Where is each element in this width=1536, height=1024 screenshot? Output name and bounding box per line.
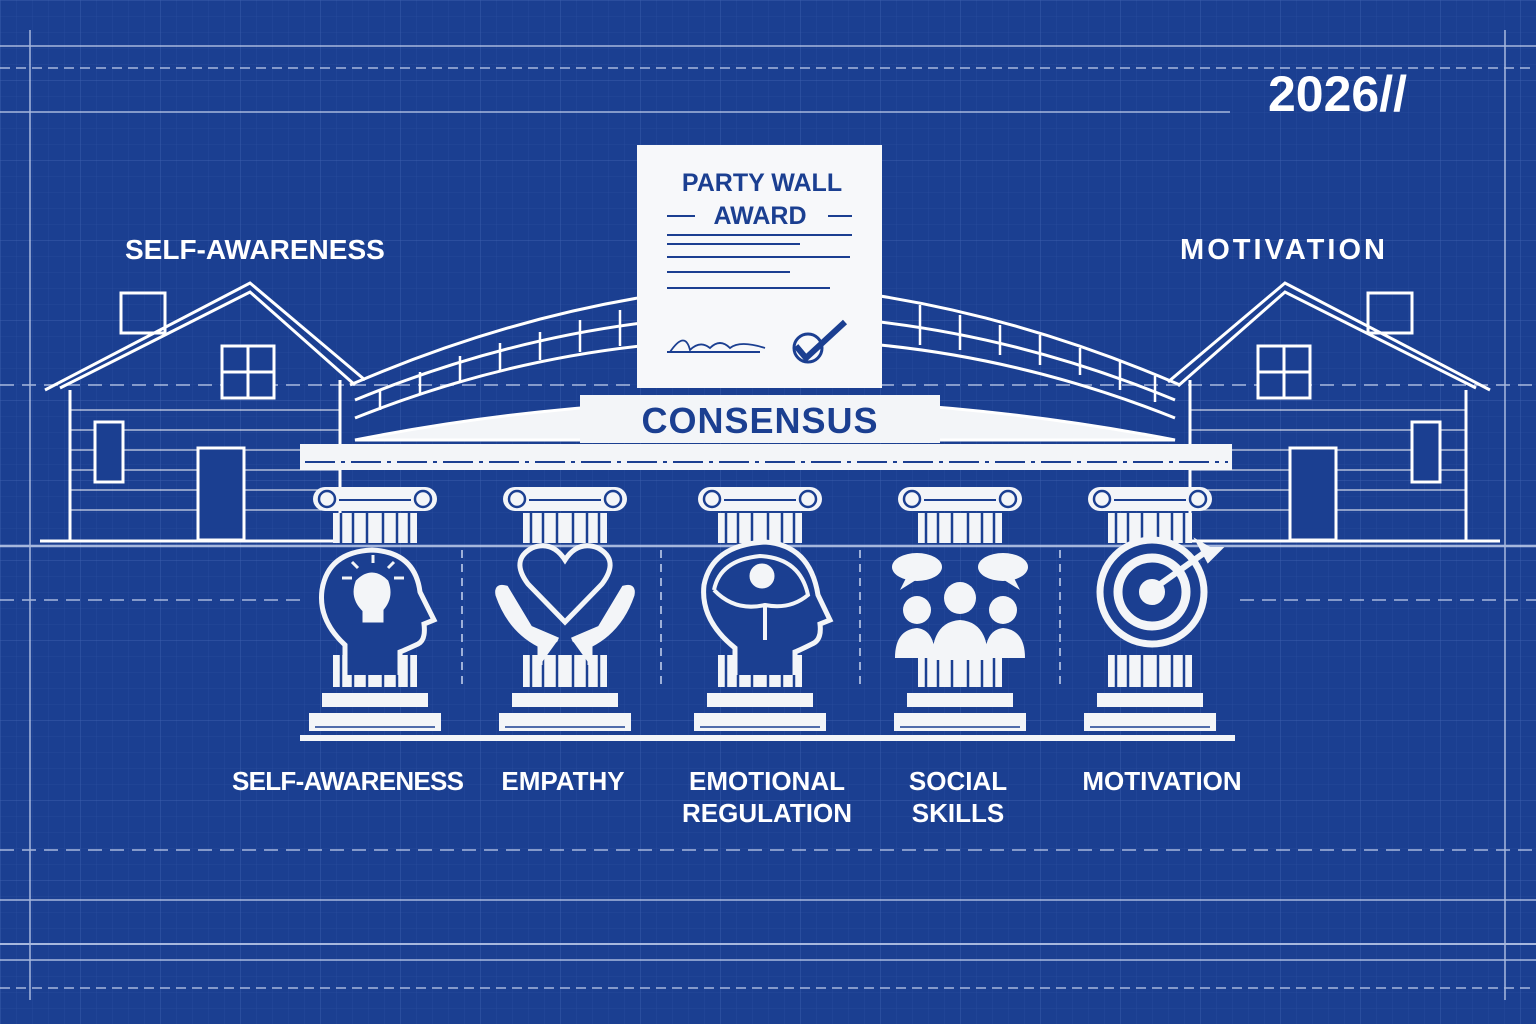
label: emotional regulation: EMOTIONAL [689, 766, 845, 796]
pillar 4: social skills [892, 487, 1028, 731]
entablature [300, 444, 1232, 470]
bridge [350, 296, 1180, 418]
icon: brain head [704, 542, 830, 675]
pillar 2: empathy [498, 487, 632, 731]
heading: self-awareness top: SELF-AWARENESS [125, 234, 385, 265]
heading: motivation top: MOTIVATION [1180, 234, 1385, 266]
label: self-awareness: SELF-AWARENESS [232, 766, 464, 796]
document: party wall award: AWARD [713, 202, 807, 230]
pillar 5: motivation [1084, 487, 1222, 731]
pillar 1: self-awareness [309, 487, 441, 731]
dashed dividers [462, 550, 1060, 690]
label: social skills: SOCIAL [909, 766, 1007, 796]
icon: heart in hands [498, 546, 632, 665]
label: empathy: EMPATHY [501, 766, 625, 796]
house right [1168, 283, 1500, 541]
icon: group with speech bubbles [892, 553, 1028, 660]
label: motivation: MOTIVATION [1082, 766, 1242, 796]
pediment: consensus: CONSENSUS [641, 400, 879, 441]
label: emotional regulation: REGULATION [682, 798, 852, 828]
pillar 3: emotional regulation [694, 487, 830, 731]
document: party wall award [637, 145, 882, 388]
pediment: consensus [355, 395, 1175, 443]
icon: head with lightbulb [321, 550, 434, 675]
year label: 2026// [1268, 66, 1407, 122]
floor line [300, 735, 1235, 741]
document: party wall award: PARTY WALL [682, 169, 842, 197]
label: social skills: SKILLS [912, 798, 1004, 828]
icon: target with arrow [1100, 540, 1222, 644]
house left [40, 283, 365, 541]
